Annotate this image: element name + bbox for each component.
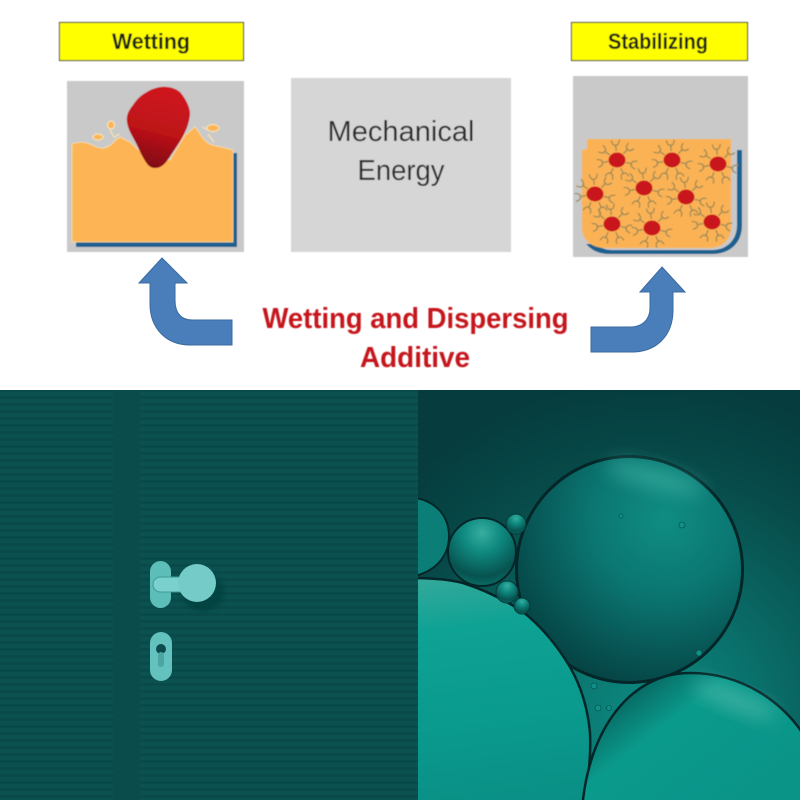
orange liquid with splash [72,127,233,242]
label: wetting and dispersing additive: Additive [360,342,470,374]
white top background [0,0,800,390]
tiny bubble lower [514,598,530,614]
stabilizing illustration background [573,76,748,257]
heading: wetting banner: Wetting [112,29,190,54]
arrow: up to stabilizing [591,267,685,352]
mechanical energy label: Mechanical [328,116,474,148]
orange liquid [582,139,731,248]
panel: wetting [60,22,244,252]
medium small bubble [448,518,516,586]
heading: stabilizing banner [572,22,748,60]
beaker edge [76,153,237,247]
large central bubble [516,454,742,682]
photo: oil bubbles [410,390,800,800]
door handle [150,561,224,611]
arrow: up to wetting [139,258,232,345]
wetting illustration background [67,81,244,252]
heading: stabilizing banner: Stabilizing [608,29,708,54]
beaker edge [586,150,742,254]
label: wetting and dispersing additive [262,303,568,374]
panel: stabilizing [572,22,748,257]
keyhole plate [150,632,172,681]
tiny bubble middle [496,581,518,603]
splash droplets [93,121,219,142]
large lower-left bubble [410,578,590,800]
energy label: Energy [358,155,445,187]
door groove [113,390,140,800]
bubble at left edge [418,498,450,576]
dispersed stabilized particles [575,140,738,248]
panel: mechanical energy [291,78,511,252]
tiny bubble top [506,514,526,534]
red pigment particle [127,87,190,168]
micro droplets [591,514,702,711]
lower-right bubble [582,673,800,800]
label: wetting and dispersing additive: Wetting and Dispersing [262,303,568,335]
photo: door with handle [0,390,418,800]
heading: wetting banner [60,22,244,60]
